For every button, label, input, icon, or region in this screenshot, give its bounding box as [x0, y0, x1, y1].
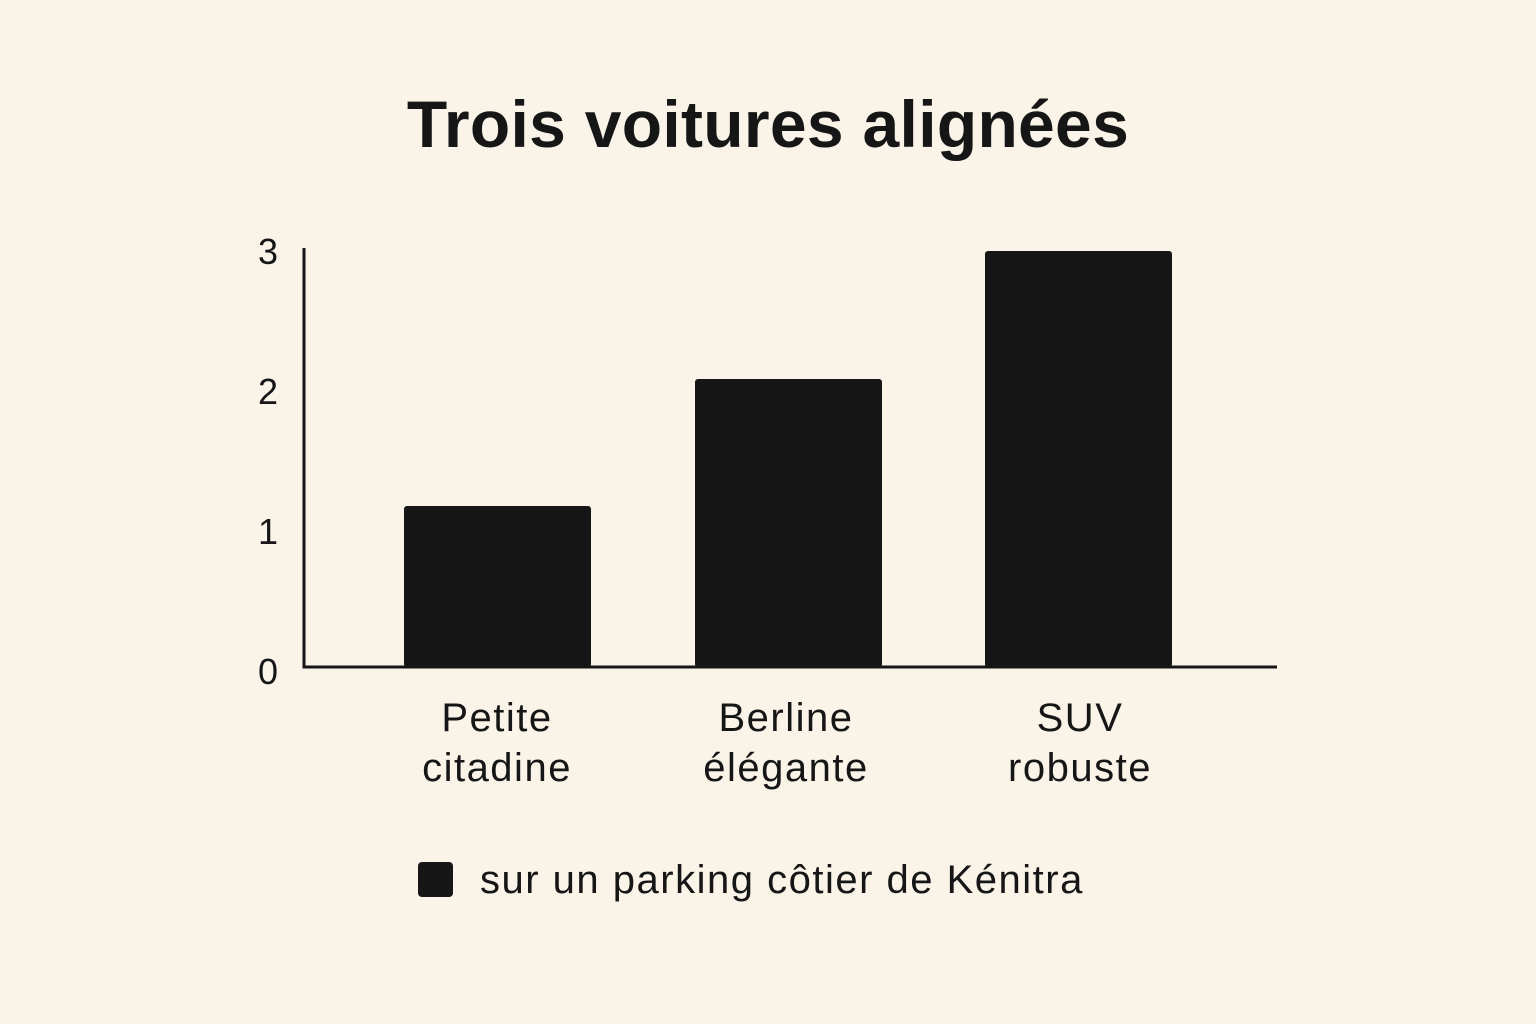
x axis labels: élégante [703, 746, 869, 790]
y axis labels [258, 231, 278, 692]
x axis labels: SUV [1037, 696, 1123, 740]
axes [304, 248, 1277, 667]
bars [404, 251, 1172, 667]
x axis labels: Petite [441, 696, 553, 740]
x axis labels: citadine [422, 746, 572, 790]
x axis labels: robuste [1008, 746, 1152, 790]
y axis labels: 3 [258, 231, 278, 272]
y axis labels: 0 [258, 651, 278, 692]
y axis labels: 2 [258, 371, 278, 412]
title: Trois voitures alignées [407, 87, 1129, 161]
legend: sur un parking côtier de Kénitra [480, 858, 1084, 902]
x axis labels [422, 696, 1152, 790]
y axis labels: 1 [258, 511, 278, 552]
x axis labels: Berline [718, 696, 854, 740]
